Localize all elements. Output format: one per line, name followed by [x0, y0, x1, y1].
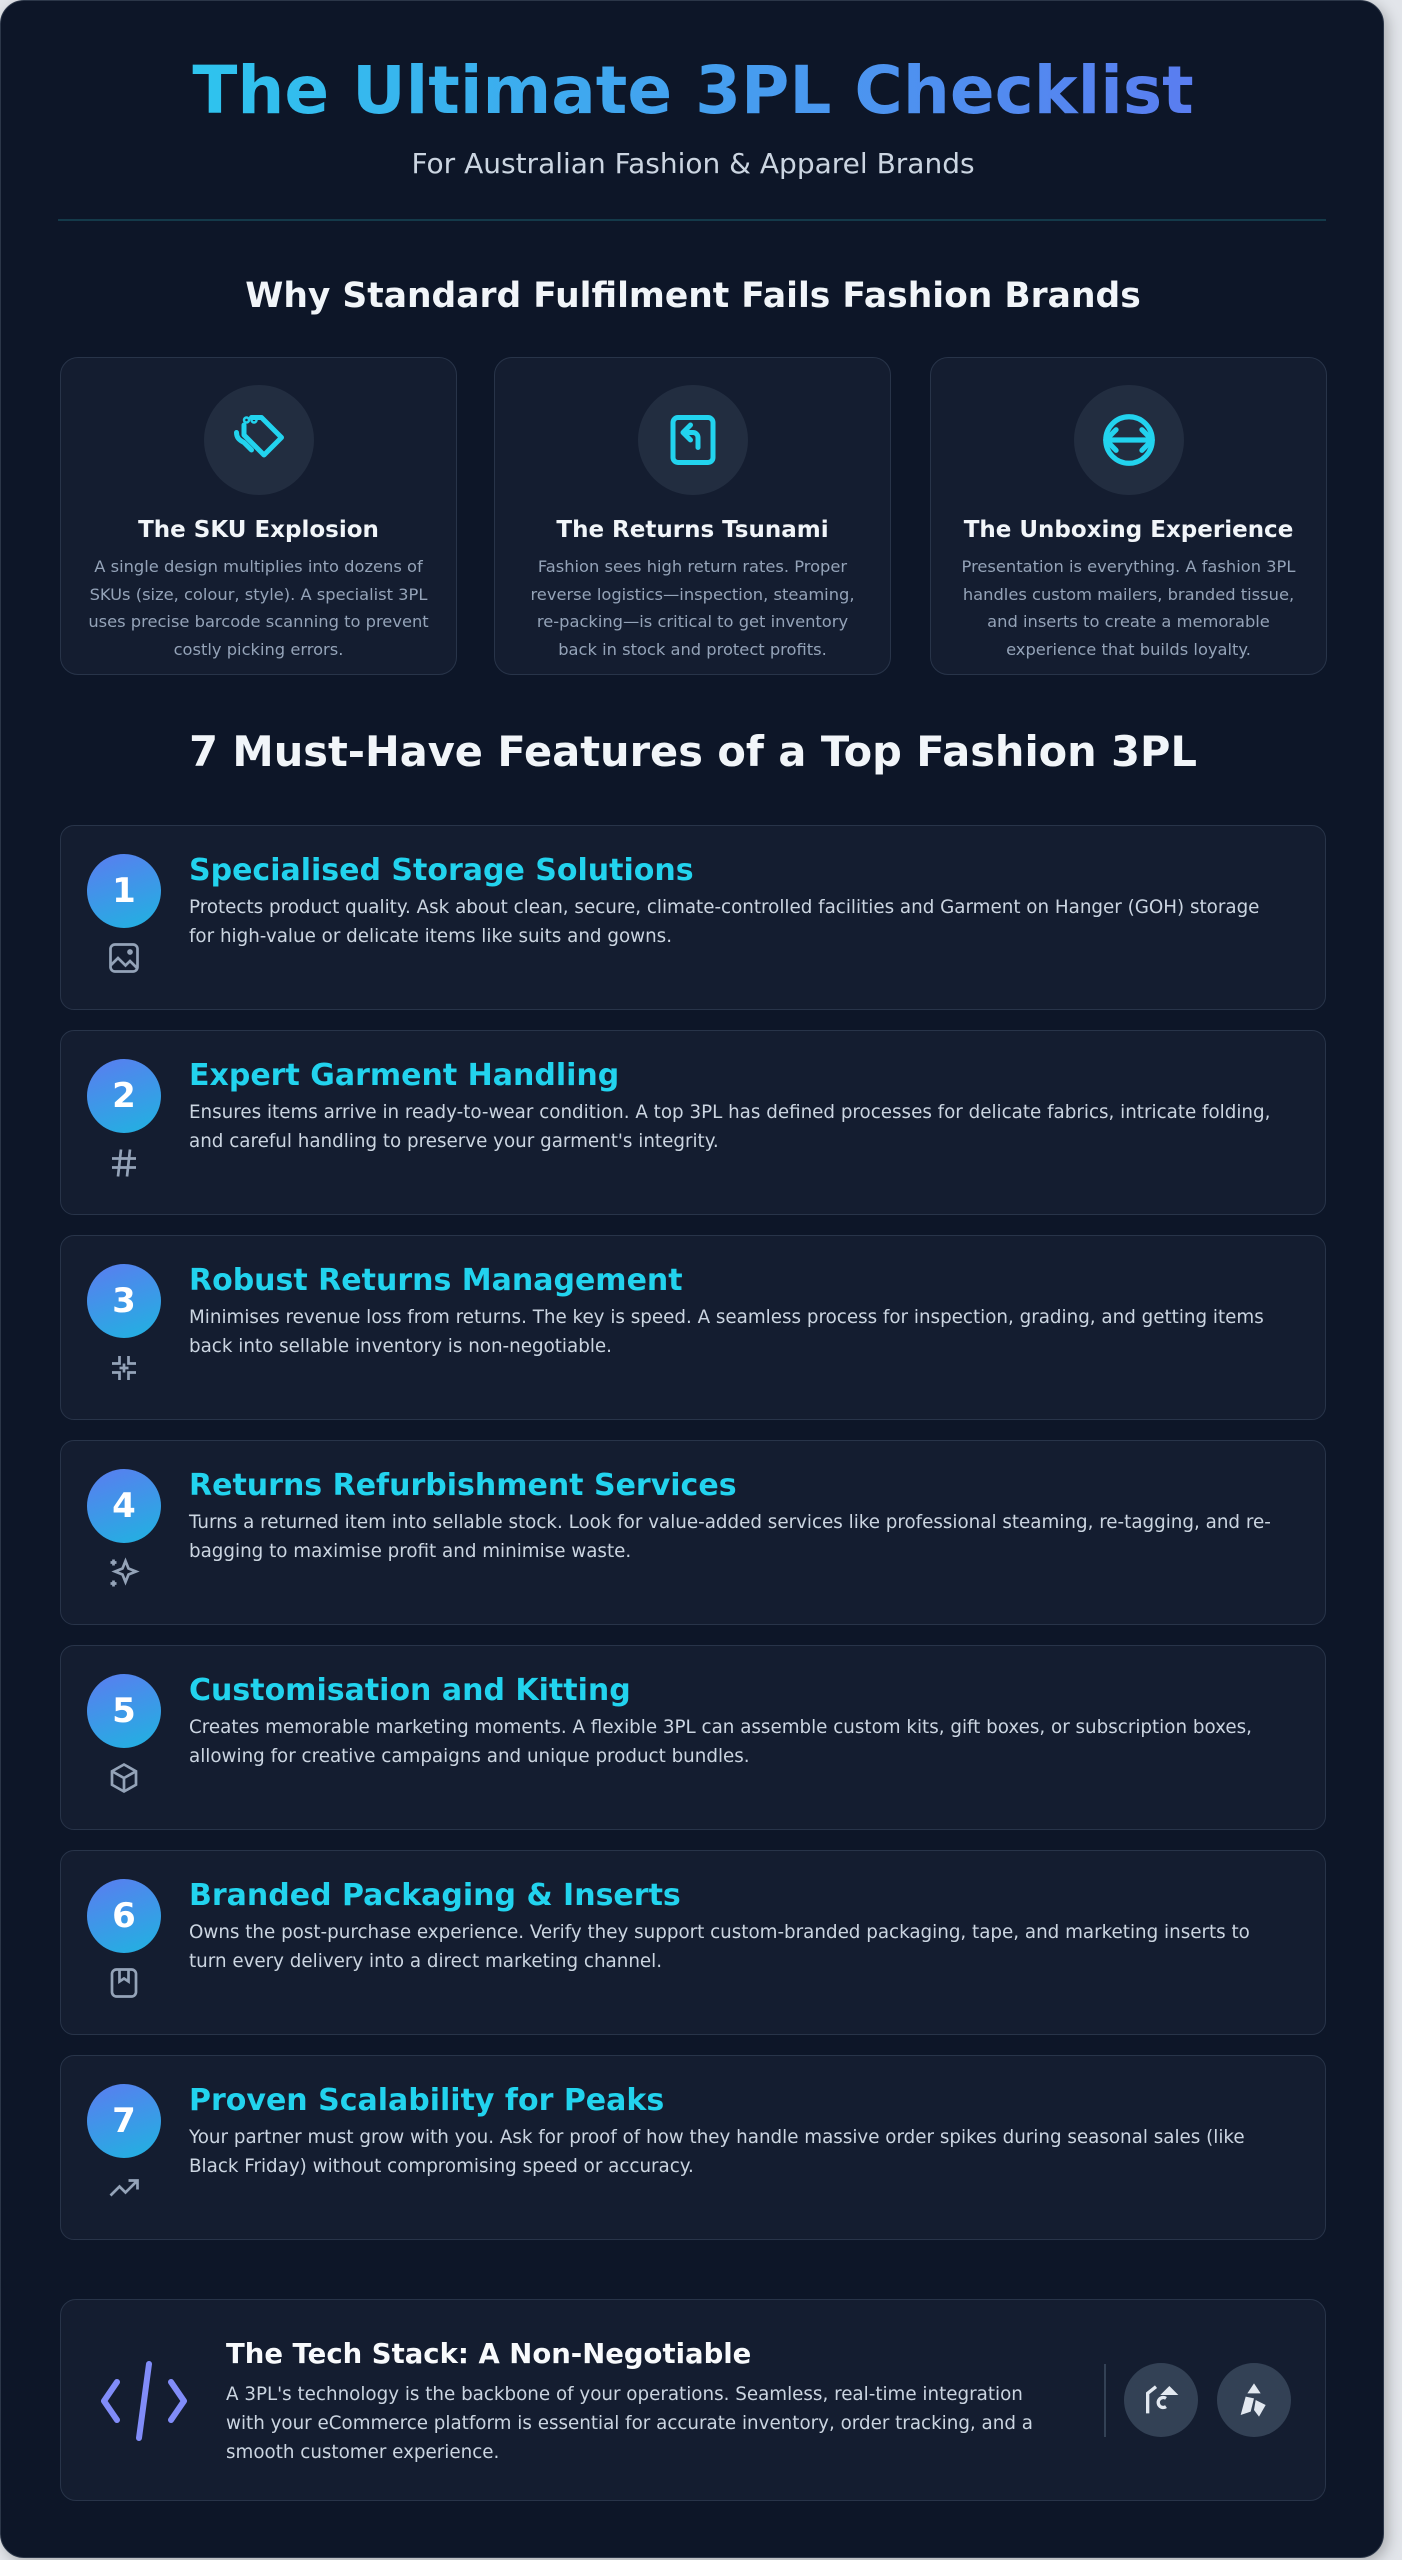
- feature 2: Expert Garment Handling: [189, 1058, 619, 1093]
- feature 2: Ensures items arrive in ready-to-wear condition. A top 3PL has defined processes for delicate fabrics, intricate folding, and careful handling to preserve your garment's integrity.: [189, 1102, 1270, 1152]
- heading: 7 must-have features: 7 Must-Have Features of a Top Fashion 3PL: [189, 727, 1197, 776]
- feature 7: Proven Scalability for Peaks: [189, 2083, 664, 2118]
- feature 7: 7: [112, 2101, 136, 2141]
- panel: returns tsunami: Fashion sees high return rates. Proper reverse logistics—inspection, steaming, re-packing—is critical to get inventory back in stock and protect profits.: [530, 557, 855, 659]
- subtitle: For Australian Fashion & Apparel Brands: [411, 147, 975, 180]
- icon: box: [110, 1763, 138, 1793]
- title: The Ultimate 3PL Checklist: [192, 52, 1194, 129]
- feature 4: [60, 1440, 1326, 1625]
- feature 5: Creates memorable marketing moments. A flexible 3PL can assemble custom kits, gift boxes, or subscription boxes, allowing for creative campaigns and unique product bundles.: [189, 1717, 1252, 1767]
- feature 3: [60, 1235, 1326, 1420]
- feature 4: Turns a returned item into sellable stock. Look for value-added services like professional steaming, re-tagging, and re-bagging to maximise profit and minimise waste.: [189, 1512, 1271, 1562]
- icon: platform logo 1: [1124, 2363, 1198, 2437]
- feature 6: Branded Packaging & Inserts: [189, 1878, 681, 1913]
- icon: code: [101, 2361, 187, 2441]
- feature 4: 4: [112, 1486, 136, 1526]
- feature 5: 5: [112, 1691, 136, 1731]
- feature 3: Robust Returns Management: [189, 1263, 683, 1298]
- icon: platform logo 2: [1217, 2363, 1291, 2437]
- feature 5: [60, 1645, 1326, 1830]
- feature 6: Owns the post-purchase experience. Verify they support custom-branded packaging, tape, and marketing inserts to turn every delivery into a direct marketing channel.: [189, 1922, 1250, 1972]
- panel: SKU explosion: A single design multiplies into dozens of SKUs (size, colour, style). A specialist 3PL uses precise barcode scanning to prevent costly picking errors.: [88, 557, 429, 659]
- feature 2: [60, 1030, 1326, 1215]
- tech description: A 3PL's technology is the backbone of your operations. Seamless, real-time integration with your eCommerce platform is essential for accurate inventory, order tracking, and a smooth customer experience.: [226, 2384, 1033, 2463]
- icon: sparkles: [110, 1558, 140, 1586]
- feature 1: [60, 825, 1326, 1010]
- icon: tag: [204, 385, 314, 495]
- panel: unboxing experience: [930, 357, 1327, 675]
- panel: unboxing experience: Presentation is everything. A fashion 3PL handles custom mailers, branded tissue, and inserts to create a memorable experience that builds loyalty.: [962, 557, 1295, 659]
- feature 6: [60, 1850, 1326, 2035]
- tech title: The Tech Stack: A Non-Negotiable: [226, 2338, 751, 2370]
- icon: expand circle: [1074, 385, 1184, 495]
- feature 3: Minimises revenue loss from returns. The key is speed. A seamless process for inspection, grading, and getting items back into sellable inventory is non-negotiable.: [189, 1307, 1264, 1357]
- feature 7: Your partner must grow with you. Ask for proof of how they handle massive order spikes during seasonal sales (like Black Friday) without compromising speed or accuracy.: [189, 2127, 1245, 2177]
- feature 1: Specialised Storage Solutions: [189, 853, 694, 888]
- feature 4: Returns Refurbishment Services: [189, 1468, 737, 1503]
- panel: SKU explosion: The SKU Explosion: [138, 517, 379, 543]
- feature 3: 3: [112, 1281, 136, 1321]
- feature 5: Customisation and Kitting: [189, 1673, 631, 1708]
- feature 1: Protects product quality. Ask about clean, secure, climate-controlled facilities and Garment on Hanger (GOH) storage for high-value or delicate items like suits and gowns.: [189, 897, 1259, 947]
- heading: why standard fulfilment fails: Why Standard Fulfilment Fails Fashion Brands: [245, 276, 1141, 316]
- feature 6: 6: [112, 1896, 136, 1936]
- icon: return box: [638, 385, 748, 495]
- feature 1: 1: [112, 871, 136, 911]
- panel: unboxing experience: The Unboxing Experience: [964, 517, 1293, 543]
- panel: SKU explosion: [60, 357, 457, 675]
- icon: book: [110, 1968, 138, 1998]
- icon: image: [109, 943, 139, 973]
- icon: shrink: [112, 1356, 136, 1380]
- panel: tech stack: [60, 2299, 1326, 2501]
- panel: returns tsunami: [494, 357, 891, 675]
- feature 2: 2: [112, 1076, 136, 1116]
- icon: trending up: [110, 2179, 139, 2196]
- panel: returns tsunami: The Returns Tsunami: [556, 517, 829, 543]
- feature 7: [60, 2055, 1326, 2240]
- icon: hash: [112, 1149, 136, 1177]
